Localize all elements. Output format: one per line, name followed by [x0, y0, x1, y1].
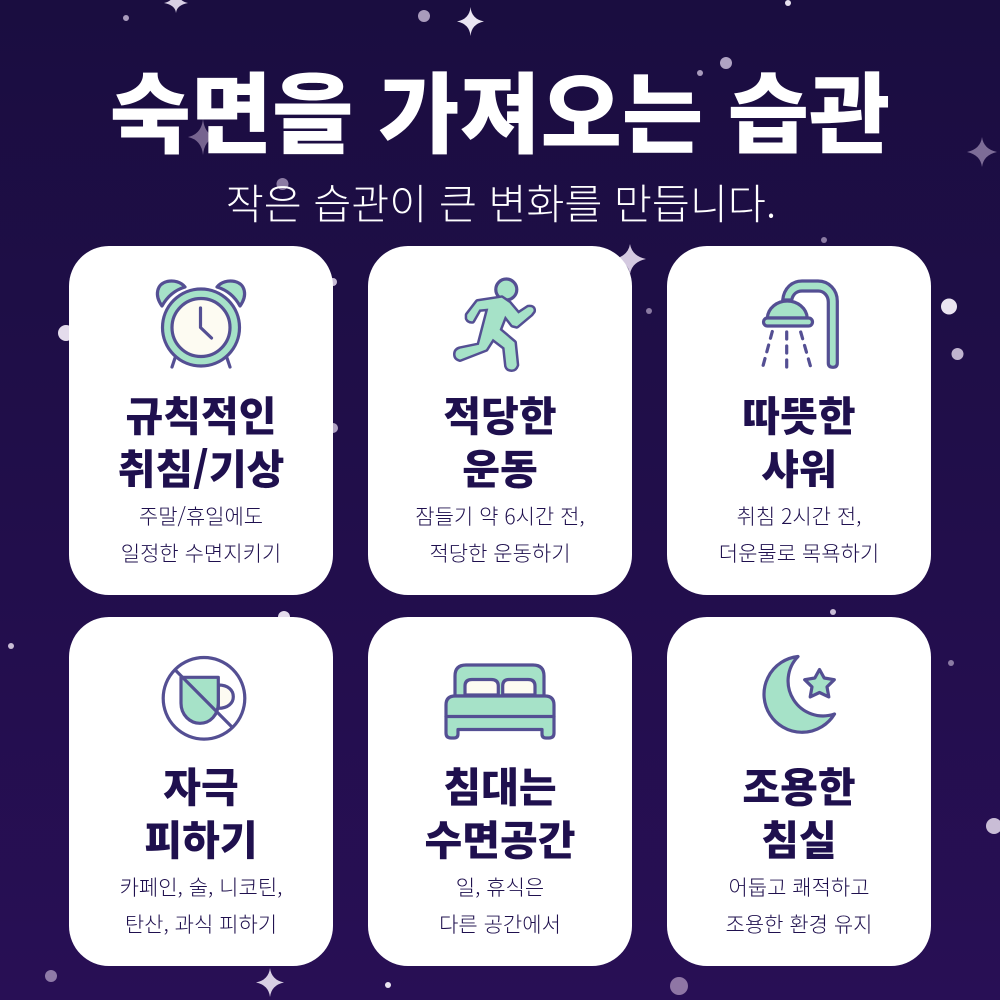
heading: 침대는 — [443, 754, 557, 814]
description line 2: 일정한 수면지키기 — [121, 538, 281, 568]
subtitle: 작은 습관이 큰 변화를 만듭니다. — [226, 171, 776, 231]
description: 일, 휴식은 — [456, 872, 544, 902]
description line 2: 더운물로 목욕하기 — [719, 538, 879, 568]
icon: runner — [456, 279, 533, 369]
description: 취침 2시간 전, — [737, 501, 861, 531]
description: 주말/휴일에도 — [139, 501, 263, 531]
heading: 적당한 — [443, 383, 557, 443]
heading: 따뜻한 — [742, 383, 856, 443]
panel: moderate exercise — [368, 246, 632, 595]
heading line 2: 피하기 — [144, 807, 258, 867]
description line 2: 다른 공간에서 — [439, 909, 561, 939]
icon: moon and star — [764, 656, 834, 732]
heading: 자극 — [163, 754, 239, 814]
heading line 2: 운동 — [462, 436, 538, 496]
description: 잠들기 약 6시간 전, — [415, 501, 585, 531]
icon: alarm clock — [157, 281, 245, 367]
heading: 규칙적인 — [126, 383, 276, 443]
heading line 2: 취침/기상 — [118, 436, 284, 496]
heading line 2: 샤워 — [761, 436, 837, 496]
panel: quiet bedroom — [667, 617, 931, 966]
panel: warm shower — [667, 246, 931, 595]
description line 2: 조용한 환경 유지 — [726, 909, 872, 939]
panel: bed is for sleep — [368, 617, 632, 966]
description line 2: 탄산, 과식 피하기 — [125, 909, 277, 939]
panel: avoid stimulants — [69, 617, 333, 966]
description: 어둡고 쾌적하고 — [728, 872, 870, 902]
icon: shower — [763, 281, 837, 368]
heading: 조용한 — [742, 754, 856, 814]
icon: bed — [446, 665, 554, 738]
heading line 2: 침실 — [761, 807, 837, 867]
panel: regular sleep schedule — [69, 246, 333, 595]
icon: no caffeine cup — [163, 658, 245, 739]
description: 카페인, 술, 니코틴, — [120, 872, 282, 902]
description line 2: 적당한 운동하기 — [429, 538, 571, 568]
heading line 2: 수면공간 — [425, 807, 575, 867]
title: 숙면을 가져오는 습관 — [110, 45, 890, 172]
